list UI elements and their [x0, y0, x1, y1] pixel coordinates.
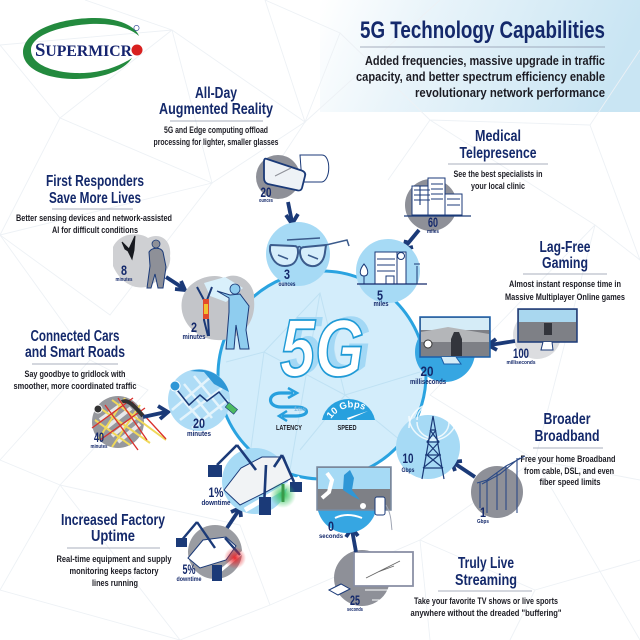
icon: VR headset: [256, 155, 329, 199]
icon: factory car with fault: [176, 522, 246, 581]
description: broader broadband: fiber speed limits: [540, 477, 600, 488]
value: 60 miles: miles: [427, 229, 439, 235]
value: 0 seconds: 0: [328, 519, 334, 534]
icon: utility poles: [471, 456, 525, 518]
description: first responders: [16, 213, 172, 236]
panel: broader broadband: [396, 404, 616, 525]
value: 0 seconds: seconds: [319, 533, 343, 540]
icon: thermal view rescue: [181, 276, 254, 349]
arrow: hospital to local clinic: [404, 230, 419, 249]
central 5G circle: 5G: [287, 300, 371, 391]
value: 20 milliseconds: 20: [420, 364, 434, 379]
description: factory uptime: lines running: [92, 578, 138, 589]
value: 25 seconds: [347, 593, 363, 613]
icon: glasses on blue circle: [266, 222, 349, 286]
heading: lag-free gaming: Lag-Free: [540, 239, 591, 256]
icon: responder in smoke: [113, 234, 170, 288]
heading: augmented reality: All-Day: [195, 85, 237, 102]
speed gauge icon: [322, 399, 375, 432]
heading: lag-free gaming: [540, 239, 591, 272]
latency icon: 1ms: [294, 407, 307, 413]
central 5G circle: 5G: [280, 303, 364, 394]
value: 2 minutes: 2: [191, 320, 197, 335]
description: medical telepresence: your local clinic: [471, 181, 525, 192]
value: 8 minutes: 8: [121, 263, 127, 278]
heading: truly live streaming: Streaming: [455, 572, 517, 589]
value: 0 seconds: [319, 519, 343, 540]
value: 100 milliseconds: milliseconds: [506, 360, 536, 366]
icon: gridlocked map: [92, 396, 166, 450]
heading: truly live streaming: Truly Live: [458, 555, 514, 572]
heading: connected cars: and Smart Roads: [25, 344, 125, 361]
description: connected cars: Say goodbye to gridlock with: [24, 369, 126, 380]
panel: factory uptime: [56, 445, 302, 589]
value: 20 minutes: [187, 416, 211, 438]
description: connected cars: [14, 369, 137, 392]
icon: local clinic: [356, 239, 427, 303]
icon: smart route map: [168, 369, 238, 431]
panel: augmented reality: [154, 85, 349, 288]
heading: first responders: [46, 173, 144, 207]
heading: broader broadband: Broader: [544, 411, 590, 428]
value: 25 seconds: seconds: [347, 607, 363, 613]
logo: Supermicro: [23, 18, 142, 79]
description: augmented reality: 5G and Edge computing offload: [164, 125, 268, 136]
description: truly live streaming: Take your favorite TV shows or live sports: [414, 596, 558, 607]
panel: connected cars: [14, 328, 238, 450]
icon: fast gaming monitor: [415, 317, 490, 382]
value: 10 Gbps: 10: [402, 451, 414, 466]
panel: truly live streaming: [317, 467, 562, 619]
value: 2 minutes: [182, 320, 206, 341]
value: 20 milliseconds: milliseconds: [410, 379, 446, 386]
description: factory uptime: monitoring keeps factory: [70, 566, 159, 577]
value: 1% downtime: 1%: [208, 485, 224, 500]
value: 60 miles: [427, 215, 439, 235]
arrow: VR to glasses: [286, 202, 298, 224]
title block: capacity, and better spectrum efficiency enable: [356, 69, 605, 84]
heading: factory uptime: [61, 512, 165, 545]
icon: cell tower with waves: [396, 404, 460, 479]
arrow: slow to fast gaming: [488, 339, 515, 350]
arrow: buffering to live: [346, 528, 358, 552]
logo: Supermicro: SUPERMICR: [35, 40, 132, 61]
heading: connected cars: [25, 328, 125, 361]
description: factory uptime: [56, 554, 172, 589]
description: broader broadband: [520, 454, 616, 488]
heading: medical telepresence: [460, 128, 537, 162]
latency icon: LATENCY: [276, 423, 302, 432]
description: augmented reality: [154, 125, 278, 148]
description: medical telepresence: [454, 169, 543, 192]
heading: broader broadband: Broadband: [534, 428, 600, 445]
description: first responders: AI for difficult conditions: [52, 225, 138, 236]
value: 5% downtime: 5%: [182, 562, 196, 577]
description: truly live streaming: [410, 596, 562, 619]
VR value: 20 ounces: ounces: [259, 198, 273, 204]
panel: lag-free gaming: [410, 239, 625, 386]
arrow: gridlock to smart route: [143, 406, 168, 419]
value: 20 minutes: minutes: [187, 431, 211, 438]
value: 40 minutes: [90, 430, 108, 450]
arrow: smoke to thermal view: [166, 277, 185, 290]
heading: augmented reality: Augmented Reality: [159, 101, 273, 118]
value: 3 ounces: ounces: [278, 281, 296, 288]
value: 1 Gbps: 1: [480, 505, 486, 520]
value: 5 miles: 5: [377, 288, 383, 303]
VR value: 20 ounces: [259, 185, 273, 204]
header band: [320, 0, 640, 112]
value: 1% downtime: downtime: [202, 500, 231, 507]
value: 1 Gbps: Gbps: [477, 519, 489, 525]
arrow: factory fault to uptime: [227, 508, 241, 528]
value: 20 milliseconds: [410, 364, 446, 386]
description: connected cars: smoother, more coordinated traffic: [14, 381, 137, 392]
description: medical telepresence: See the best specialists in: [454, 169, 543, 180]
value: 5% downtime: downtime: [176, 576, 202, 583]
value: 2 minutes: minutes: [182, 334, 206, 341]
value: 8 minutes: minutes: [116, 277, 132, 283]
panel: medical telepresence: [356, 128, 548, 308]
description: augmented reality: processing for lighter, smaller glasses: [154, 137, 278, 148]
value: 1% downtime: [202, 485, 231, 507]
panel: first responders: [16, 173, 254, 349]
description: factory uptime: Real-time equipment and supply: [56, 554, 172, 565]
value: 60 miles: 60: [428, 215, 438, 230]
heading: first responders: Save More Lives: [49, 190, 141, 207]
heading: first responders: First Responders: [46, 173, 144, 190]
icon: live sports on TV and phone: [317, 467, 392, 533]
value: 40 minutes: minutes: [90, 444, 108, 450]
heading: factory uptime: Increased Factory: [61, 512, 165, 529]
speed gauge icon: 10 Gbps: [327, 400, 366, 418]
VR value: 20 ounces: 20: [260, 185, 272, 200]
value: 5% downtime: [176, 562, 202, 583]
value: 5 miles: [374, 288, 389, 308]
heading: medical telepresence: Medical: [475, 128, 521, 145]
value: 10 Gbps: [402, 451, 415, 474]
latency icon: [270, 388, 307, 432]
description: truly live streaming: anywhere without the dreaded "buffering": [410, 608, 562, 619]
heading: connected cars: Connected Cars: [30, 328, 120, 345]
description: lag-free gaming: [505, 279, 625, 303]
icon: slow gaming monitor: [513, 309, 577, 359]
value: 5 miles: miles: [374, 301, 389, 308]
value: 40 minutes: 40: [94, 430, 104, 445]
value: 25 seconds: 25: [350, 593, 360, 608]
heading: augmented reality: [159, 85, 273, 118]
heading: truly live streaming: [455, 555, 517, 589]
arrow: poles to tower: [452, 461, 475, 477]
value: 1 Gbps: [477, 505, 489, 525]
title block: [356, 17, 605, 100]
icon: buffering TV: [329, 550, 413, 606]
central 5G circle: [218, 271, 426, 479]
heading: factory uptime: Uptime: [91, 528, 135, 545]
heading: medical telepresence: Telepresence: [460, 145, 537, 162]
value: 100 milliseconds: [506, 346, 536, 366]
value: 100 milliseconds: 100: [513, 346, 529, 361]
heading: broader broadband: [534, 411, 600, 445]
value: 3 ounces: 3: [284, 267, 290, 282]
heading: lag-free gaming: Gaming: [542, 255, 588, 272]
description: first responders: Better sensing devices and network-assisted: [16, 213, 172, 224]
value: 3 ounces: [278, 267, 296, 288]
value: 20 minutes: 20: [193, 416, 205, 431]
icon: hospital complex: [404, 178, 471, 231]
value: 8 minutes: [116, 263, 132, 283]
title block: revolutionary network performance: [415, 85, 605, 100]
icon: factory car running: [208, 445, 302, 515]
speed gauge icon: SPEED: [338, 423, 357, 432]
value: 10 Gbps: Gbps: [402, 467, 415, 474]
